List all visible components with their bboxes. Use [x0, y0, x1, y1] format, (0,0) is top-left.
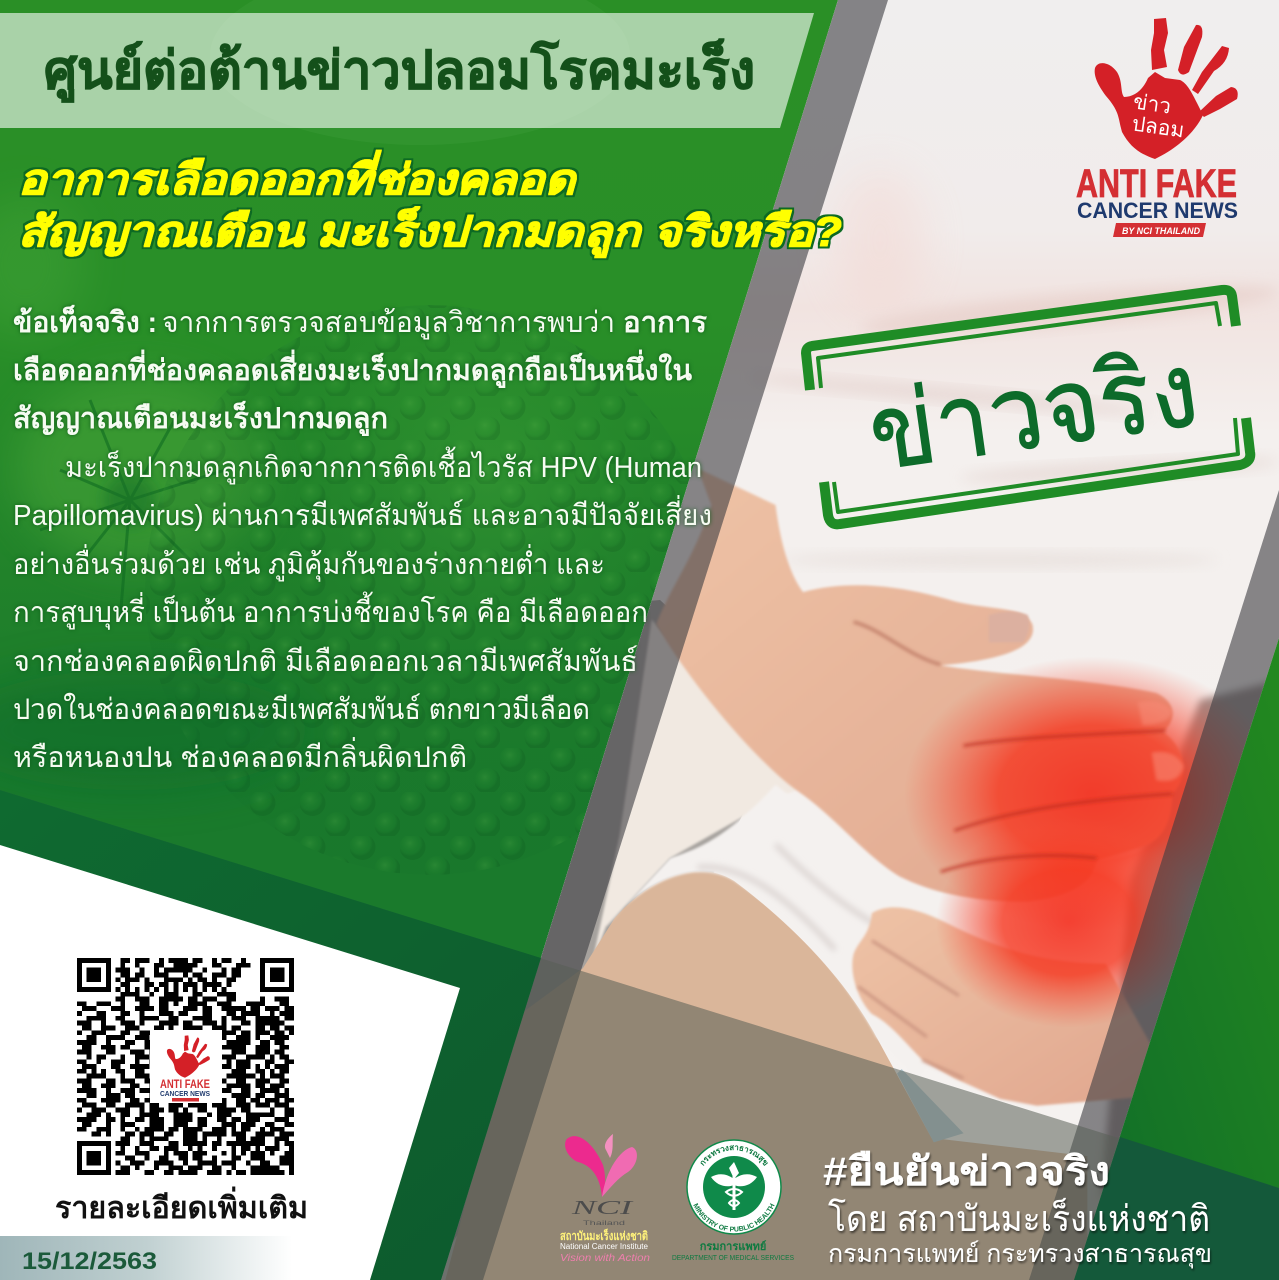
body text: มะเร็งปากมดลูกเกิดจากการติดเชื้อไวรัส HPV (Human — [65, 446, 702, 485]
logo: Ministry of Public Health: MINISTRY OF PUBLIC HEALTH — [693, 1203, 774, 1232]
lower hand — [852, 907, 1152, 1106]
stamp: true news — [806, 290, 1250, 524]
white sheet — [592, 620, 798, 964]
subtitle — [18, 150, 842, 258]
dark green lower left — [0, 790, 541, 1280]
footer credit text: โดย สถาบันมะเร็งแห่งชาติ — [828, 1196, 1210, 1239]
footer credit text — [823, 1150, 1212, 1269]
logo: Anti Fake Cancer News: ปลอม — [1130, 112, 1186, 143]
header bar — [0, 13, 814, 128]
date bar — [0, 1236, 292, 1280]
footer credit text: #ยืนยันข่าวจริง — [823, 1150, 1110, 1194]
grey diagonal strip left — [441, 0, 888, 1280]
grey diagonal strip right — [1029, 490, 1279, 1280]
body text: จากการตรวจสอบข้อมูลวิชาการพบว่า — [162, 307, 615, 340]
logo: National Cancer Institute: Thailand — [583, 1220, 626, 1227]
footer credit text: กรมการแพทย์ กระทรวงสาธารณสุข — [828, 1240, 1212, 1269]
logo: Ministry of Public Health: กระทรวงสาธารณสุข — [700, 1145, 768, 1166]
logo: Anti Fake Cancer News: BY NCI THAILAND — [1122, 226, 1200, 237]
logo: National Cancer Institute: NCI — [570, 1197, 634, 1219]
finger creases — [941, 731, 1172, 872]
QR centre logo: ANTI FAKE — [160, 1077, 210, 1091]
white shorts — [614, 786, 878, 1041]
logo: National Cancer Institute: National Cancer Institute — [560, 1242, 649, 1251]
translucent lower band — [0, 790, 1279, 1280]
body text: ปวดในช่องคลอดขณะมีเพศสัมพันธ์ ตกขาวมีเลือด — [13, 692, 590, 726]
logo: Ministry of Public Health: DEPARTMENT OF MEDICAL SERVICES — [672, 1253, 794, 1262]
stamp text: ข่าวจริง — [862, 332, 1205, 493]
body text: จากช่องคลอดผิดปกติ มีเลือดออกเวลามีเพศสัมพันธ์ — [13, 645, 638, 678]
body text: อาการ — [623, 307, 707, 339]
logo: National Cancer Institute: Vision with Action — [560, 1253, 650, 1264]
QR code — [77, 958, 294, 1175]
background bed — [453, 600, 742, 1242]
body text: การสูบบุหรี่ เป็นต้น อาการบ่งชี้ของโรค คือ มีเลือดออก — [13, 591, 648, 630]
QR centre logo: CANCER NEWS — [160, 1089, 210, 1098]
subtitle: อาการเลือดออกที่ช่องคลอด — [18, 150, 578, 203]
body text: อย่างอื่นร่วมด้วย เช่น ภูมิคุ้มกันของร่างกายต่ำ และ — [13, 544, 605, 582]
logo: Anti Fake Cancer News — [1076, 18, 1238, 237]
heading: ศูนย์ต่อต้านข่าวปลอมโรคมะเร็ง — [44, 39, 755, 103]
logo: Ministry of Public Health — [672, 1139, 794, 1262]
body text: หรือหนองปน ช่องคลอดมีกลิ่นผิดปกติ — [13, 737, 467, 774]
logo: Ministry of Public Health: กรมการแพทย์ — [700, 1240, 766, 1253]
body text: เลือดออกที่ช่องคลอดเสี่ยงมะเร็งปากมดลูกถือเป็นหนึ่งใน — [13, 349, 692, 388]
body text: ข้อเท็จจริง : — [13, 304, 157, 339]
icon: caduceus — [711, 1162, 757, 1210]
logo: Anti Fake Cancer News: ข่าว — [1132, 90, 1172, 119]
upper hand and arm — [656, 468, 1184, 902]
dark green lower right — [1074, 1137, 1279, 1280]
logo: National Cancer Institute: สถาบันมะเร็งแห่งชาติ — [560, 1228, 648, 1243]
logo: Anti Fake Cancer News: CANCER NEWS — [1077, 198, 1238, 223]
body text: Papillomavirus) ผ่านการมีเพศสัมพันธ์ และอาจมีปัจจัยเสี่ยง — [13, 495, 712, 532]
subtitle: สัญญาณเตือน มะเร็งปากมดลูก จริงหรือ? — [18, 206, 842, 258]
body text: สัญญาณเตือนมะเร็งปากมดลูก — [13, 400, 388, 436]
red pain glow — [914, 660, 1244, 910]
QR centre logo — [150, 1030, 222, 1103]
QR caption: รายละเอียดเพิ่มเติม — [55, 1186, 308, 1225]
logo: National Cancer Institute — [560, 1134, 650, 1264]
panel: green background with virus texture — [0, 0, 838, 1280]
thigh — [445, 871, 1087, 1280]
date: 15/12/2563 — [22, 1248, 157, 1275]
panel: photo of woman holding abdomen — [430, 0, 1279, 1280]
body text — [13, 304, 712, 774]
green corner bottom right — [1074, 638, 1279, 1280]
panel: QR white — [0, 845, 460, 1280]
